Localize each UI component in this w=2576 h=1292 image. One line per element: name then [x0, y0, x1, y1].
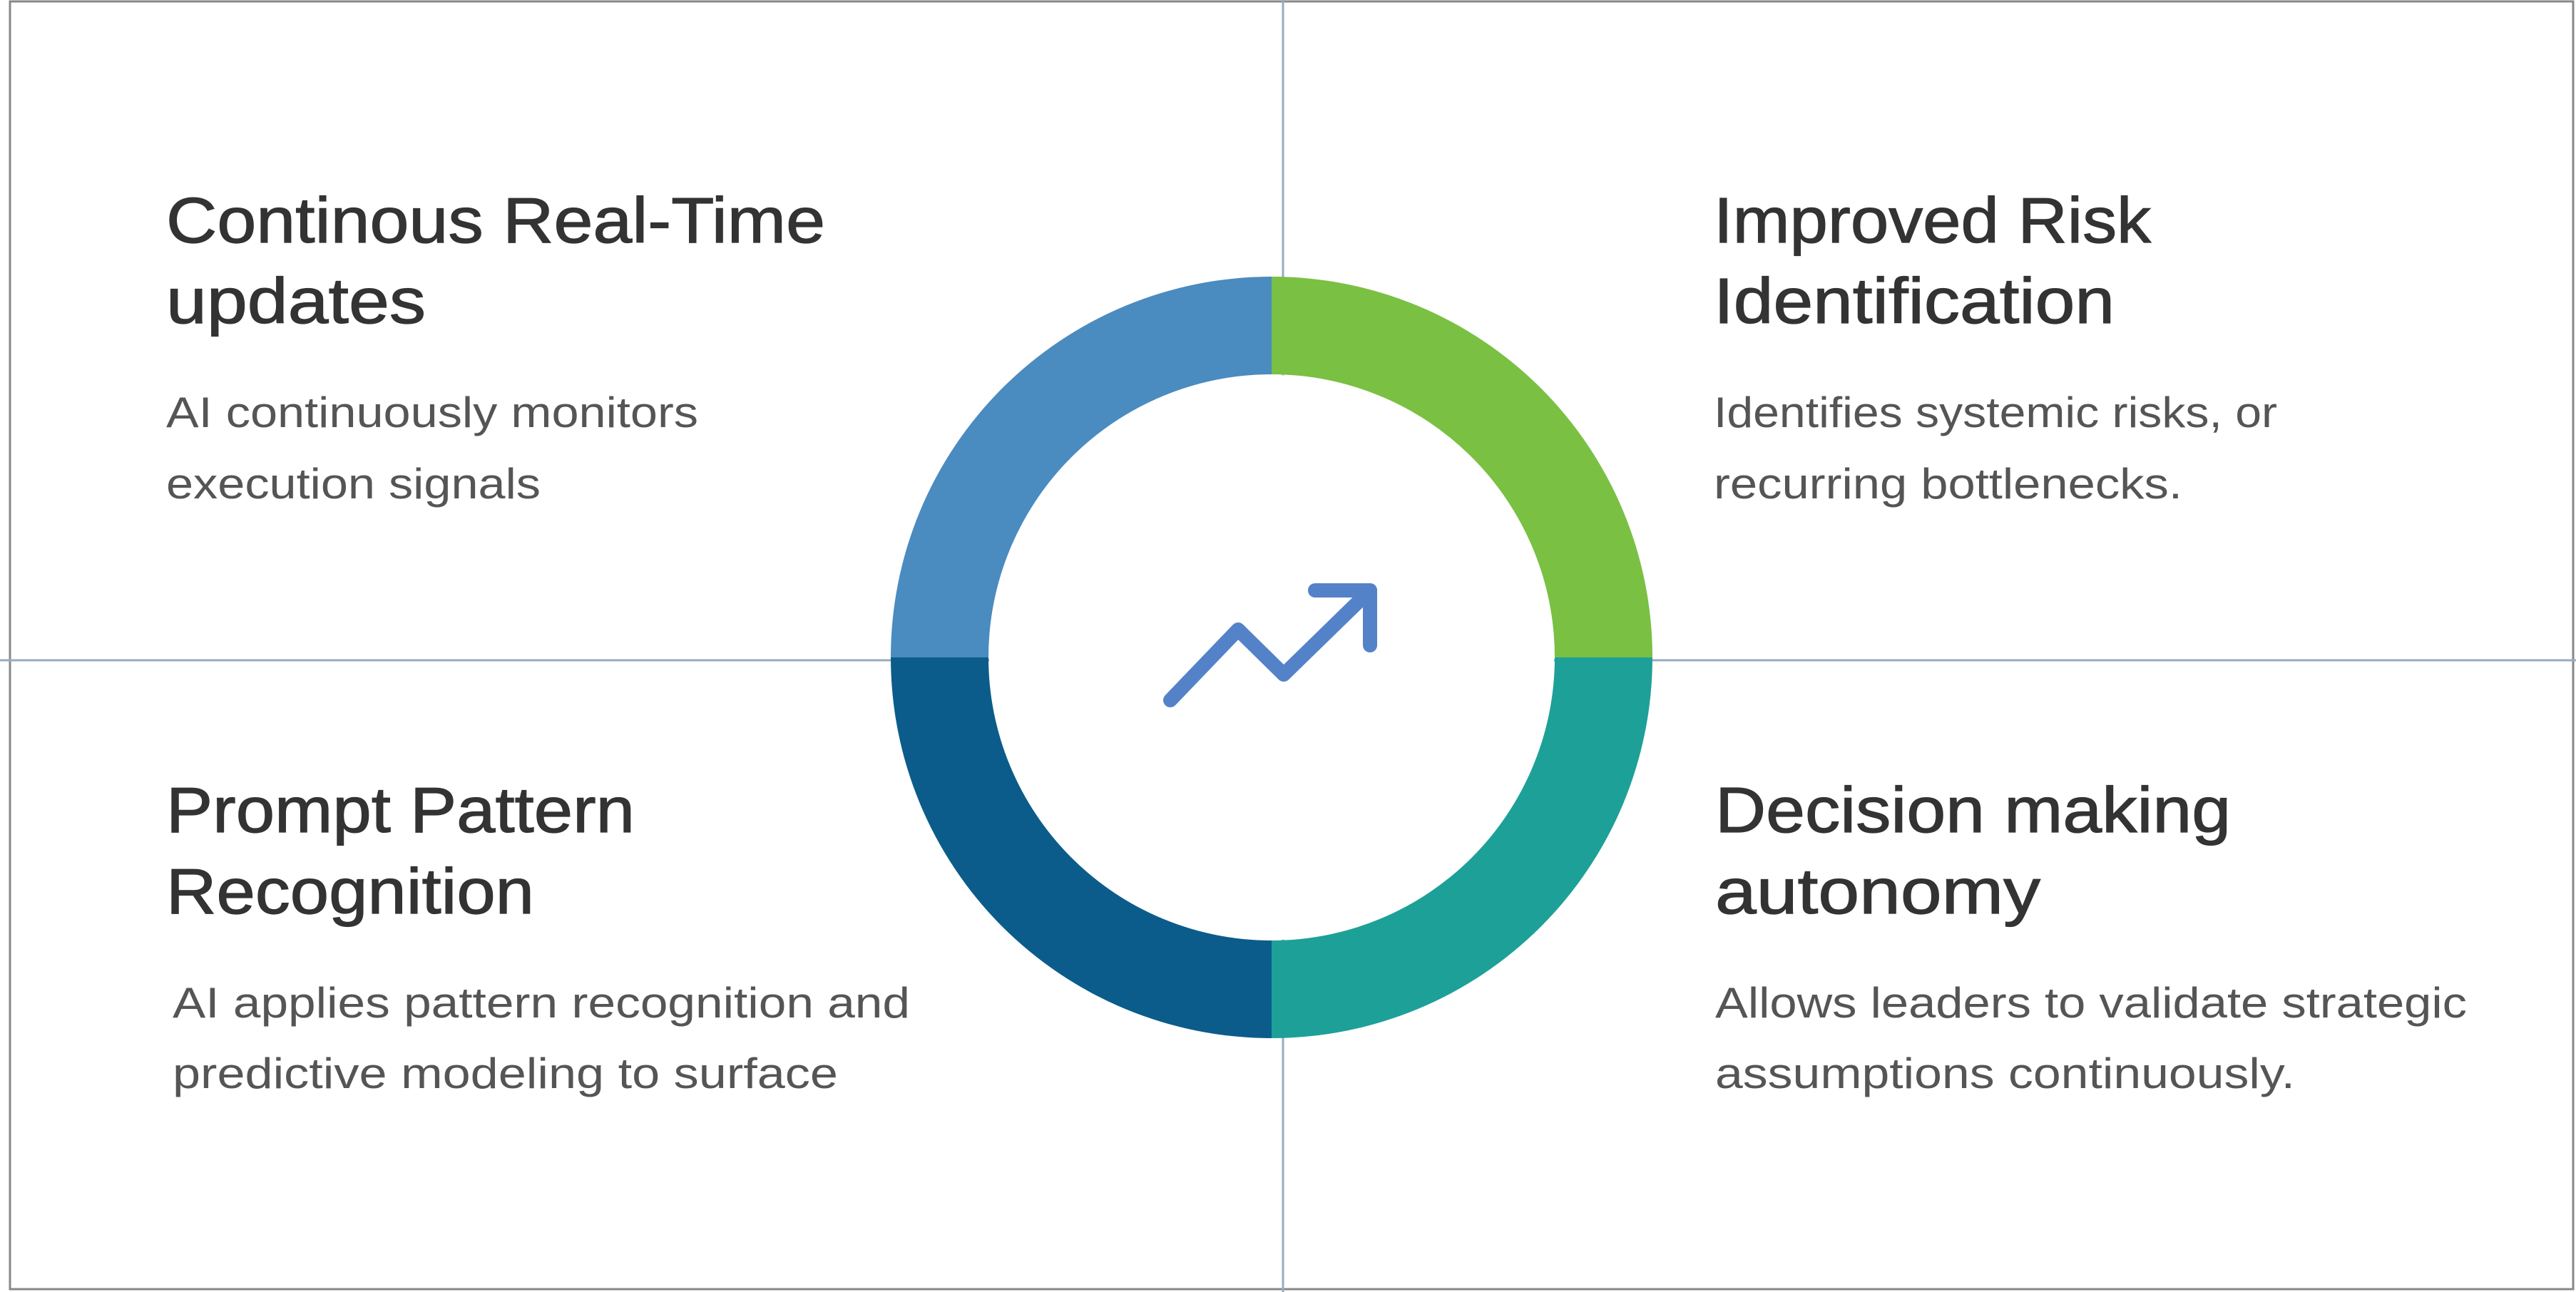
body text: Allows leaders to validate strategic — [1715, 979, 2467, 1027]
heading: autonomy — [1715, 856, 2040, 928]
heading: Improved Risk — [1714, 185, 2152, 257]
heading: Recognition — [166, 856, 534, 928]
ring center fill — [989, 375, 1554, 940]
panel: top-left — [166, 185, 825, 508]
panel: bottom-right — [1715, 775, 2467, 1097]
body text — [166, 389, 698, 508]
heading: updates — [166, 266, 426, 337]
panel: top-right — [1714, 185, 2277, 508]
ring segment: teal — [1272, 657, 1652, 1038]
body text: predictive modeling to surface — [173, 1050, 838, 1097]
heading — [166, 775, 635, 928]
ring segment: dark blue — [891, 657, 1272, 1038]
icon: trending up arrow — [1170, 590, 1370, 700]
body text — [173, 979, 910, 1097]
body text: recurring bottlenecks. — [1714, 460, 2182, 508]
heading: Continous Real-Time — [166, 185, 825, 257]
body text: execution signals — [166, 460, 541, 508]
body text — [1715, 979, 2467, 1097]
ring segment: light blue — [891, 277, 1272, 657]
panel: bottom-left — [166, 775, 910, 1097]
heading: Prompt Pattern — [166, 775, 635, 846]
body text: assumptions continuously. — [1715, 1050, 2295, 1097]
donut ring — [891, 277, 1652, 1038]
body text: AI applies pattern recognition and — [173, 979, 910, 1027]
heading — [166, 185, 825, 337]
heading: Identification — [1714, 266, 2115, 337]
heading: Decision making — [1715, 775, 2231, 846]
body text: AI continuously monitors — [166, 389, 698, 436]
ring segment: green — [1272, 277, 1652, 657]
heading — [1714, 185, 2152, 337]
body text — [1714, 389, 2277, 508]
heading — [1715, 775, 2231, 928]
body text: Identifies systemic risks, or — [1714, 389, 2277, 436]
